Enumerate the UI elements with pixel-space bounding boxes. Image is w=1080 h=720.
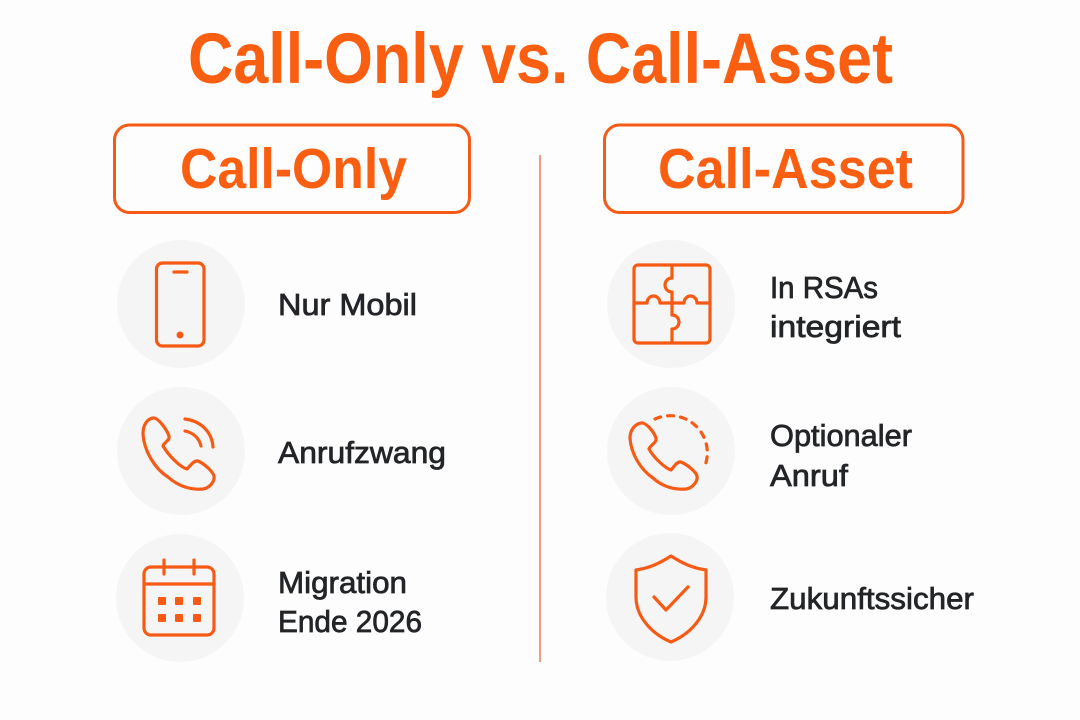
item: Migration Ende 2026: Ende 2026 [278, 604, 422, 639]
item: Anrufzwang [117, 387, 446, 515]
icon: calendar [144, 560, 214, 635]
panel: Call-Asset [604, 125, 974, 661]
icon: phone with dashed circle [630, 416, 707, 489]
heading box: Call-Only [114, 125, 470, 212]
heading box: Call-Only: Call-Only [180, 137, 407, 201]
item: Migration Ende 2026 [116, 534, 422, 662]
item: In RSAs integriert: In RSAs [770, 270, 878, 305]
heading box: Call-Asset: Call-Asset [658, 137, 913, 201]
item: Anrufzwang: Anrufzwang [278, 435, 446, 470]
item: In RSAs integriert [607, 240, 901, 368]
item: Nur Mobil: Nur Mobil [278, 287, 417, 322]
item: Optionaler Anruf: Anruf [770, 458, 848, 493]
icon: puzzle [634, 265, 710, 343]
heading box: Call-Asset [604, 125, 963, 212]
title: Call-Only vs. Call-Asset [188, 20, 893, 99]
item: Nur Mobil [117, 240, 417, 368]
item: In RSAs integriert: integriert [770, 309, 901, 344]
icon: phone with signal waves [143, 418, 214, 489]
item: Zukunftssicher: Zukunftssicher [770, 581, 974, 616]
item: Zukunftssicher [606, 533, 974, 661]
icon: smartphone [156, 263, 204, 346]
icon: shield with check [636, 556, 706, 642]
item: Migration Ende 2026: Migration [278, 565, 407, 600]
item: Optionaler Anruf [607, 387, 912, 515]
center divider [539, 155, 541, 662]
item: Optionaler Anruf: Optionaler [770, 418, 912, 453]
panel: Call-Only [114, 125, 470, 662]
